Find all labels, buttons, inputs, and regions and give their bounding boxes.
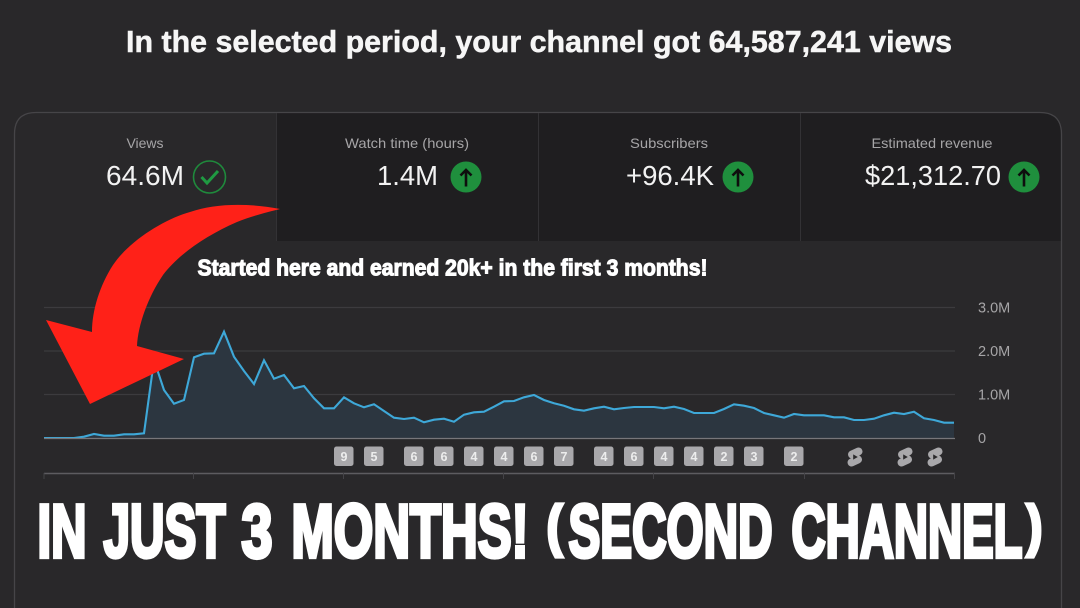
headline: in just 3 months: (: [547, 494, 562, 557]
y-axis labels: 3.0M: [978, 300, 1010, 316]
line chart: daily views: [44, 308, 955, 479]
stat: views: [106, 135, 226, 193]
upload count badges: 4: [601, 450, 608, 464]
upload count badges: 7: [561, 450, 568, 464]
stat: watch time: 1.4M: [377, 160, 438, 191]
upload count badges: 3: [751, 450, 758, 464]
stat: subscribers: +96.4K: [626, 160, 714, 191]
upload count badges: 6: [531, 450, 538, 464]
stat: subscribers: [626, 135, 754, 192]
stat: views: Views: [126, 135, 164, 151]
upload count badges: 4: [661, 450, 668, 464]
headline: in just 3 months: 3: [242, 489, 272, 573]
icon: up arrow: [1008, 162, 1040, 192]
arrow: red curved arrow: [46, 205, 280, 404]
y-axis labels: 1.0M: [978, 388, 1010, 404]
icon: up arrow: [722, 162, 754, 192]
headline: in just 3 months: IN: [38, 489, 86, 573]
upload count badges: 4: [691, 450, 698, 464]
stat: estimated revenue: [865, 135, 1040, 192]
stat: estimated revenue: $21,312.70: [865, 160, 1001, 191]
stat: estimated revenue: Estimated revenue: [872, 135, 993, 151]
icon: shorts marker: [902, 452, 908, 462]
icon: shorts marker: [852, 452, 858, 462]
headline: in just 3 months: ): [1027, 494, 1042, 557]
headline: in just 3 months: MONTHS!: [292, 489, 528, 573]
upload count badges: 6: [441, 450, 448, 464]
headline: in just 3 months: JUST: [104, 489, 226, 573]
upload count badges: 6: [631, 450, 638, 464]
panel: analytics card: [14, 112, 1062, 608]
upload count badges: 5: [371, 450, 378, 464]
stat: subscribers: Subscribers: [630, 135, 708, 151]
stat: watch time: [345, 135, 482, 192]
upload count badges: 2: [791, 450, 798, 464]
upload count badges: 2: [721, 450, 728, 464]
headline: in just 3 months: SECOND: [568, 489, 772, 573]
upload count badges: 4: [471, 450, 478, 464]
stat: views: 64.6M: [106, 160, 184, 191]
upload count badges: 9: [341, 450, 348, 464]
icon: check circle: [194, 161, 226, 193]
stat: watch time: Watch time (hours): [345, 135, 469, 151]
headline: in just 3 months: [38, 489, 1042, 573]
y-axis labels: [978, 300, 1010, 447]
y-axis labels: 0: [978, 431, 986, 447]
callout: started here: Started here and earned 20k+ in the first 3 months!: [198, 254, 708, 280]
icon: shorts marker: [932, 452, 938, 462]
upload count badges: 6: [411, 450, 418, 464]
heading: views summary: In the selected period, your channel got 64,587,241 views: [126, 24, 952, 59]
y-axis labels: 2.0M: [978, 344, 1010, 360]
upload count badges: [334, 446, 804, 466]
icon: up arrow: [450, 162, 482, 192]
upload count badges: 4: [501, 450, 508, 464]
